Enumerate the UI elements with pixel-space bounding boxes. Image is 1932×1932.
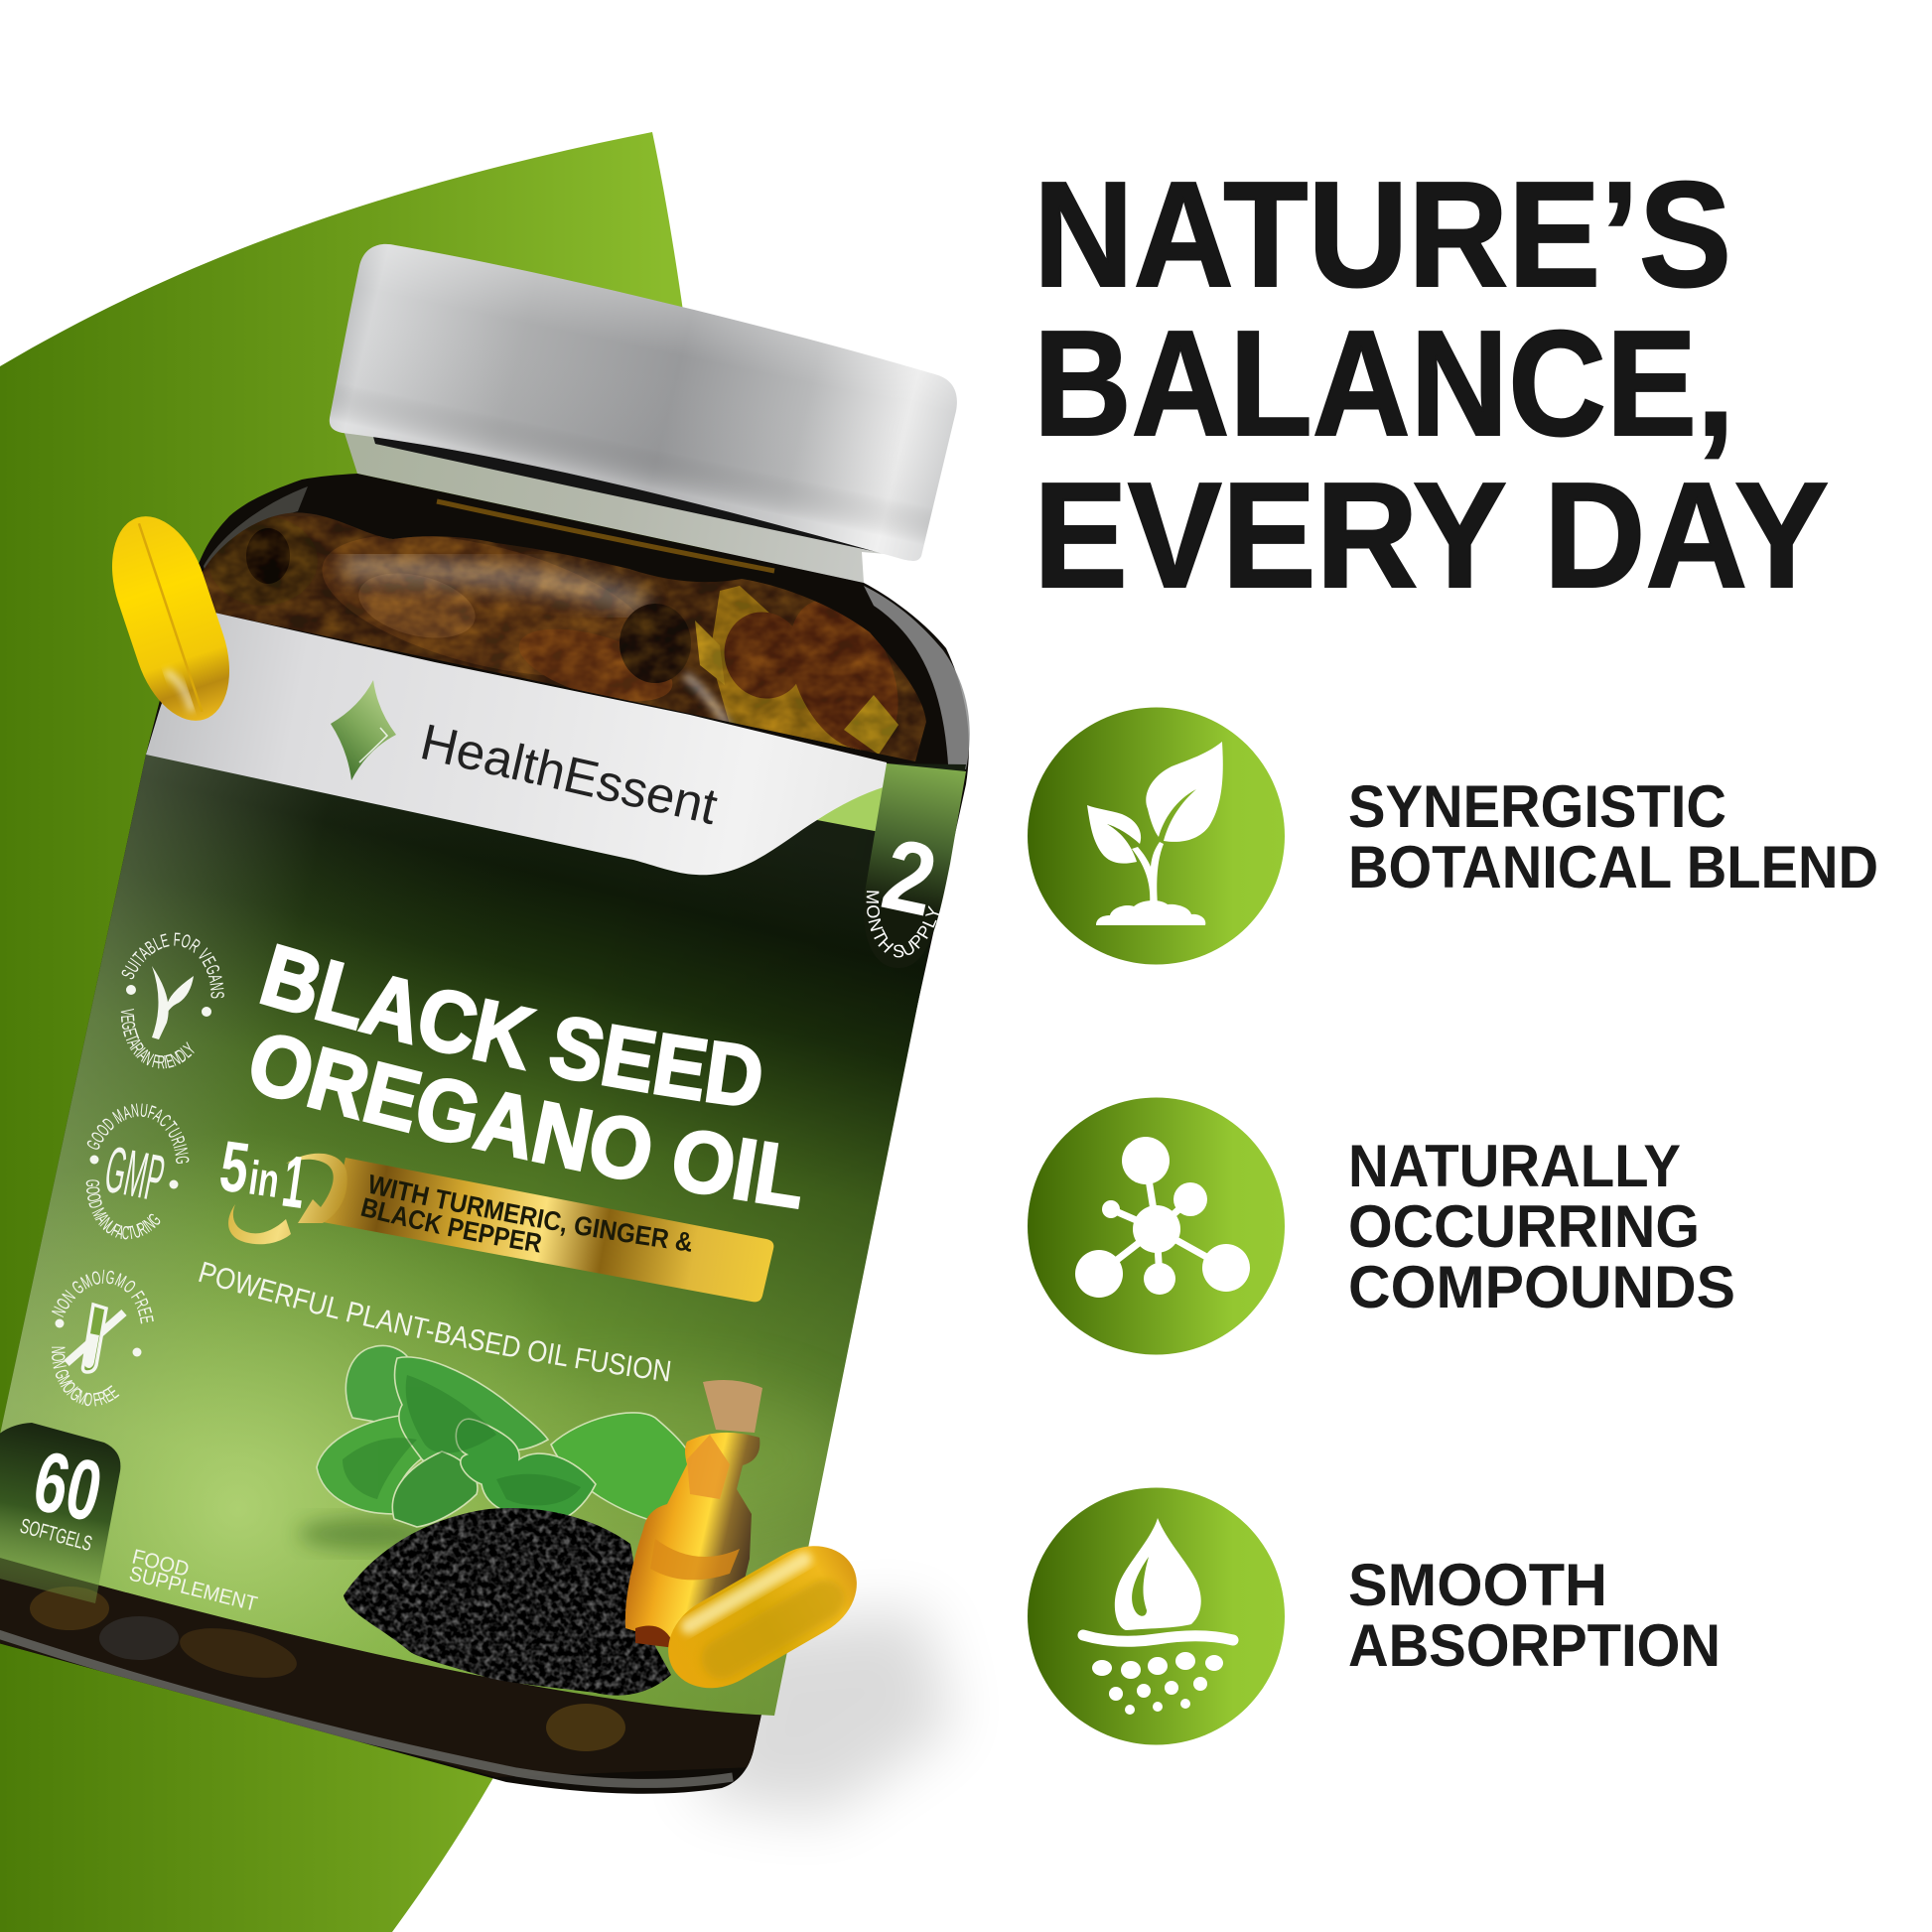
- badge: 60 softgels: SOFTGELS: [18, 1515, 94, 1556]
- feature text: BOTANICAL BLEND: [1348, 834, 1878, 900]
- month supply tab: [866, 763, 966, 957]
- feature text: ABSORPTION: [1348, 1612, 1721, 1679]
- feature text: [1348, 773, 1878, 900]
- 5 in 1 badge: [215, 1127, 347, 1244]
- ribbon text: BLACK PEPPER: [361, 1197, 541, 1253]
- 5 in 1 badge: 5: [215, 1127, 254, 1209]
- badge: vegan: SUITABLE FOR VEGANS: [121, 933, 224, 999]
- label: [0, 613, 966, 1716]
- product title: OREGANO OIL: [251, 1035, 800, 1209]
- headline: [1034, 150, 1829, 619]
- feature text: COMPOUNDS: [1348, 1254, 1735, 1320]
- badge: 60 softgels: 60: [26, 1434, 110, 1540]
- feature: synergistic botanical blend: [1028, 707, 1878, 965]
- 5 in 1 badge: in: [245, 1152, 283, 1208]
- brand logo diamond: [331, 680, 396, 780]
- badge: vegan: VEGETARIAN FRIENDLY: [121, 1009, 195, 1068]
- icon: oil drop on skin: [1028, 1487, 1285, 1745]
- food supplement text: [127, 1546, 260, 1616]
- softgels inside the jar: [0, 501, 953, 1783]
- badge: GMP: GOOD MANUFACTURING: [87, 1104, 189, 1164]
- black seeds: [344, 1508, 671, 1696]
- white brand band: [146, 613, 887, 875]
- badge: GMP: GOOD MANUFACTURING: [85, 1179, 161, 1239]
- headline: BALANCE,: [1034, 299, 1734, 467]
- headline: NATURE’S: [1034, 150, 1731, 318]
- drop shadow of bottle: [695, 1608, 953, 1817]
- month supply tab: MONTH SUPPLY: [866, 891, 939, 957]
- feature: smooth absorption: [1028, 1487, 1721, 1745]
- badge: vegan: [121, 933, 224, 1068]
- softgels at jar base: [0, 1579, 761, 1777]
- softgel pill: bottom right: [651, 1528, 874, 1707]
- tagline: POWERFUL PLANT-BASED OIL FUSION: [199, 1261, 671, 1382]
- badge: non GMO: NON GMO/GMO FREE: [52, 1269, 154, 1324]
- cap: [330, 244, 957, 561]
- oil bottle: [625, 1380, 762, 1648]
- month supply tab: 2: [874, 817, 946, 938]
- green curved background shape: [0, 132, 720, 1932]
- feature text: [1348, 1552, 1721, 1679]
- neck glass: [343, 427, 911, 583]
- badge: 60 softgels: [0, 1423, 120, 1603]
- oregano leaves: [317, 1346, 692, 1527]
- headline: EVERY DAY: [1034, 451, 1829, 619]
- badge: non GMO: NON GMO/GMO FREE: [52, 1346, 119, 1406]
- amber streaks at jar shoulder: [437, 501, 774, 571]
- gold ribbon: [323, 1158, 773, 1302]
- icon: molecule: [1028, 1098, 1285, 1354]
- badge: GMP: GMP: [99, 1132, 170, 1215]
- feature: naturally occurring compounds: [1028, 1098, 1735, 1354]
- product title: [251, 943, 800, 1209]
- badge: GMP: [85, 1104, 189, 1239]
- softgel pill: top left: [94, 503, 247, 734]
- feature text: NATURALLY: [1348, 1133, 1681, 1199]
- feature text: [1348, 1133, 1735, 1320]
- glass shoulder reflections: [864, 586, 970, 769]
- bottle: [0, 423, 970, 1794]
- feature text: OCCURRING: [1348, 1193, 1700, 1260]
- label background: [0, 745, 983, 1737]
- light green swoosh: [817, 786, 887, 832]
- feature text: SMOOTH: [1348, 1552, 1607, 1618]
- food supplement text: FOOD: [130, 1546, 192, 1582]
- ribbon text: WITH TURMERIC, GINGER &: [370, 1173, 691, 1252]
- product title: BLACK SEED: [259, 943, 761, 1106]
- food supplement text: SUPPLEMENT: [127, 1563, 260, 1616]
- feature text: SYNERGISTIC: [1348, 773, 1726, 840]
- herb shadow: [298, 1518, 437, 1550]
- badge: non GMO: [52, 1269, 154, 1406]
- glass body: [0, 474, 969, 1794]
- icon: sprout: [1028, 707, 1285, 965]
- leaf shading: [343, 1375, 581, 1505]
- brand name: HealthEssent: [416, 713, 723, 835]
- 5 in 1 badge: 1: [278, 1140, 311, 1224]
